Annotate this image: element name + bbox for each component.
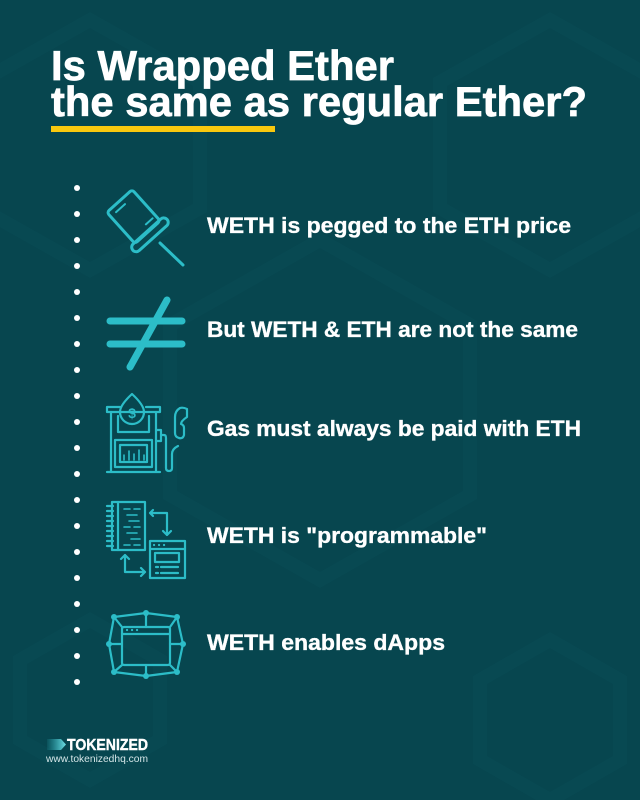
icon: not equal sign xyxy=(110,300,182,367)
icon: dApp network window xyxy=(106,610,186,679)
title: the same as regular Ether? xyxy=(51,78,587,125)
icon: code and window xyxy=(107,502,185,578)
brand logo: TOKENIZED xyxy=(67,737,148,754)
website url: www.tokenizedhq.com xyxy=(45,753,148,765)
title: Is Wrapped Ether xyxy=(51,42,394,89)
item 3 text: Gas must always be paid with ETH xyxy=(207,416,581,441)
item 5 text: WETH enables dApps xyxy=(207,630,445,655)
icon: push pin xyxy=(102,186,183,265)
title underline xyxy=(51,126,275,132)
title xyxy=(51,42,587,125)
dotted timeline xyxy=(74,185,80,685)
gas icon dollar sign: $ xyxy=(128,405,136,421)
item 4 text: WETH is "programmable" xyxy=(207,523,487,548)
icon: gas pump xyxy=(107,394,187,472)
item 2 text: But WETH & ETH are not the same xyxy=(207,317,578,342)
item 1 text: WETH is pegged to the ETH price xyxy=(207,213,571,238)
